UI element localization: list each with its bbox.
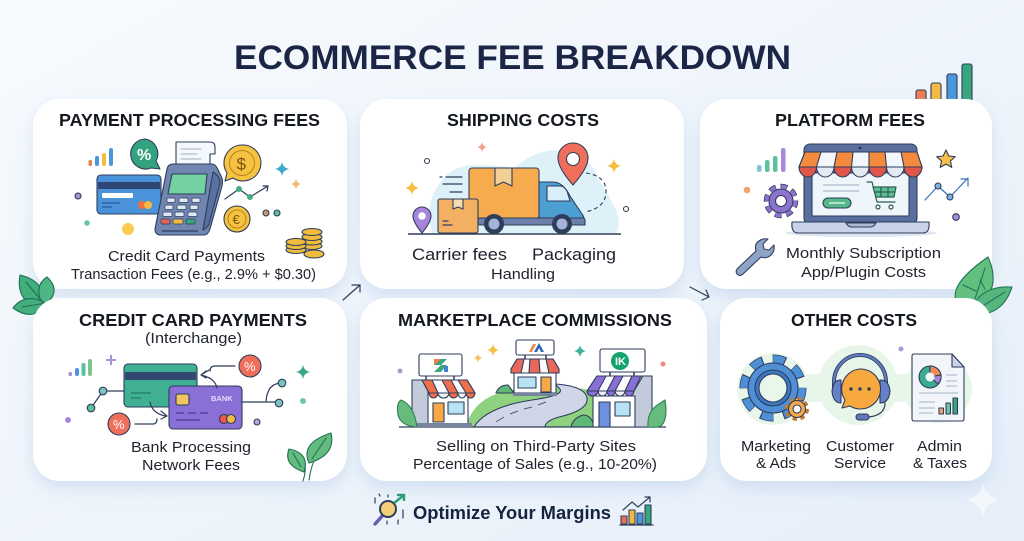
- footer: optimize your margins: [375, 494, 653, 525]
- icon: small bars: [757, 148, 786, 172]
- text: payment details: Transaction Fees (e.g., 2.9% + $0.30): [71, 266, 316, 283]
- icon: small bars: [68, 359, 92, 376]
- green backdrop blobs: [737, 345, 972, 425]
- labels: other costs: Service: [834, 455, 886, 472]
- text: platform details: Monthly Subscription: [786, 245, 941, 262]
- icon: laptop storefront: [785, 144, 937, 237]
- icon: purple bank card: BANK: [211, 394, 233, 403]
- icon: percent badges: %: [113, 417, 125, 432]
- decorative dots: [744, 187, 959, 220]
- decorative sparkles and dots: [398, 344, 666, 374]
- icon: small bars: [88, 148, 113, 166]
- icon: gear: [766, 186, 796, 216]
- arrows and network nodes: [87, 366, 286, 424]
- panel: marketplace commissions: [360, 298, 707, 481]
- arrow: shipping to marketplace: [343, 285, 360, 300]
- icon: left storefront: [412, 354, 475, 427]
- text: payment details: [71, 248, 316, 283]
- illustration: three storefronts: [397, 340, 666, 427]
- hills and road: [466, 384, 603, 427]
- heading: credit card payments: CREDIT CARD PAYMENTS: [79, 310, 307, 330]
- icon: dollar coin: [224, 145, 261, 181]
- icon: bushes: [397, 400, 666, 427]
- decorative white sparkle: [967, 484, 999, 516]
- text: payment details: Credit Card Payments: [108, 248, 265, 265]
- illustration: online shop laptop: [736, 144, 968, 276]
- text: marketplace details: Percentage of Sales (e.g., 10-20%): [413, 456, 657, 473]
- icon: trend line: [225, 186, 268, 200]
- labels: other costs: Admin: [917, 438, 962, 455]
- heading: shipping costs: SHIPPING COSTS: [447, 110, 599, 130]
- panel: credit card payments: [33, 298, 347, 481]
- icon: receipt: [176, 142, 215, 168]
- text: platform details: [786, 245, 941, 281]
- labels: other costs: Customer: [826, 438, 894, 455]
- heading: marketplace commissions: MARKETPLACE COMMISSIONS: [398, 310, 672, 330]
- subheading: interchange: (Interchange): [145, 330, 242, 347]
- decorative sparkles and dots: [65, 355, 310, 425]
- heading: other costs: OTHER COSTS: [791, 310, 917, 330]
- icon: sprout: [288, 433, 332, 481]
- logo: centre store sign: [529, 343, 544, 352]
- icon: shopping cart: [867, 182, 896, 209]
- text: credit card details: [131, 439, 251, 474]
- decorative sparkles and dots: [75, 162, 301, 235]
- icon: growth bars top right: [916, 64, 972, 106]
- icon: rising bar chart: [620, 497, 653, 525]
- illustration: delivery truck: [405, 142, 628, 234]
- panel: platform fees: [700, 99, 992, 289]
- icon: percent badges: [108, 355, 261, 435]
- icon: truck: [440, 168, 585, 234]
- logo: right store sign: IK: [615, 356, 626, 368]
- panel: shipping costs: [360, 99, 684, 289]
- icon: coin stack: [286, 228, 324, 258]
- text: shipping details: Handling: [491, 266, 555, 283]
- text: credit card details: Network Fees: [142, 457, 240, 474]
- icon: right storefront: [587, 349, 652, 427]
- heading: payment processing fees: PAYMENT PROCESSING FEES: [59, 110, 320, 130]
- icon: credit card: [97, 175, 161, 214]
- decorative sparkles and dots: [405, 142, 628, 212]
- text: shipping details: [412, 245, 616, 283]
- labels: other costs: Marketing: [741, 438, 811, 455]
- illustration: cards and network: [65, 355, 332, 481]
- icon: leaves right: [955, 257, 1012, 314]
- text: platform details: App/Plugin Costs: [801, 264, 926, 281]
- icon: purple bank card: [169, 386, 242, 429]
- labels: other costs: & Taxes: [913, 455, 967, 472]
- icon: euro coin: €: [232, 212, 240, 227]
- illustration: card terminal and coins: [75, 139, 324, 258]
- labels: other costs: & Ads: [756, 455, 796, 472]
- icon: gears: [745, 360, 806, 418]
- labels: other costs: [741, 438, 967, 472]
- panel: other costs: [720, 298, 992, 481]
- icon: dollar coin: $: [236, 154, 246, 174]
- icon: parcel: [438, 199, 478, 233]
- icon: star: [937, 150, 955, 167]
- icon: green card: [124, 364, 197, 407]
- text: marketplace details: Selling on Third-Party Sites: [436, 438, 636, 455]
- icon: centre storefront: [511, 340, 559, 396]
- icon: support headset: [832, 355, 890, 420]
- icon: payment terminal: [155, 164, 222, 235]
- heading: platform fees: PLATFORM FEES: [775, 110, 925, 130]
- text: shipping details: Packaging: [532, 245, 616, 264]
- icon: percent bubble: %: [137, 147, 151, 164]
- icon: trend line: [925, 178, 968, 200]
- icon: red location pin: [558, 143, 588, 185]
- logo: left store sign: [434, 359, 448, 372]
- footer text: Optimize Your Margins: [413, 503, 611, 523]
- icon: euro coin: [224, 206, 250, 232]
- icon: percent bubble: [131, 139, 160, 169]
- dashed route: [585, 173, 606, 212]
- icon: purple location pin: [413, 207, 431, 233]
- decorative dot: [898, 346, 904, 352]
- arrow: platform flow: [690, 287, 709, 300]
- icon: wrench: [736, 239, 774, 276]
- text: credit card details: Bank Processing: [131, 439, 251, 456]
- text: shipping details: Carrier fees: [412, 245, 507, 264]
- panel: payment processing fees: [33, 99, 347, 289]
- icon: magnifier with arrow: [375, 494, 404, 524]
- icon: percent badges: %: [244, 359, 256, 374]
- icon: leaves left: [13, 275, 54, 314]
- title: ECOMMERCE FEE BREAKDOWN: [234, 39, 791, 77]
- text: marketplace details: [413, 438, 657, 473]
- icon: report document: [912, 354, 964, 421]
